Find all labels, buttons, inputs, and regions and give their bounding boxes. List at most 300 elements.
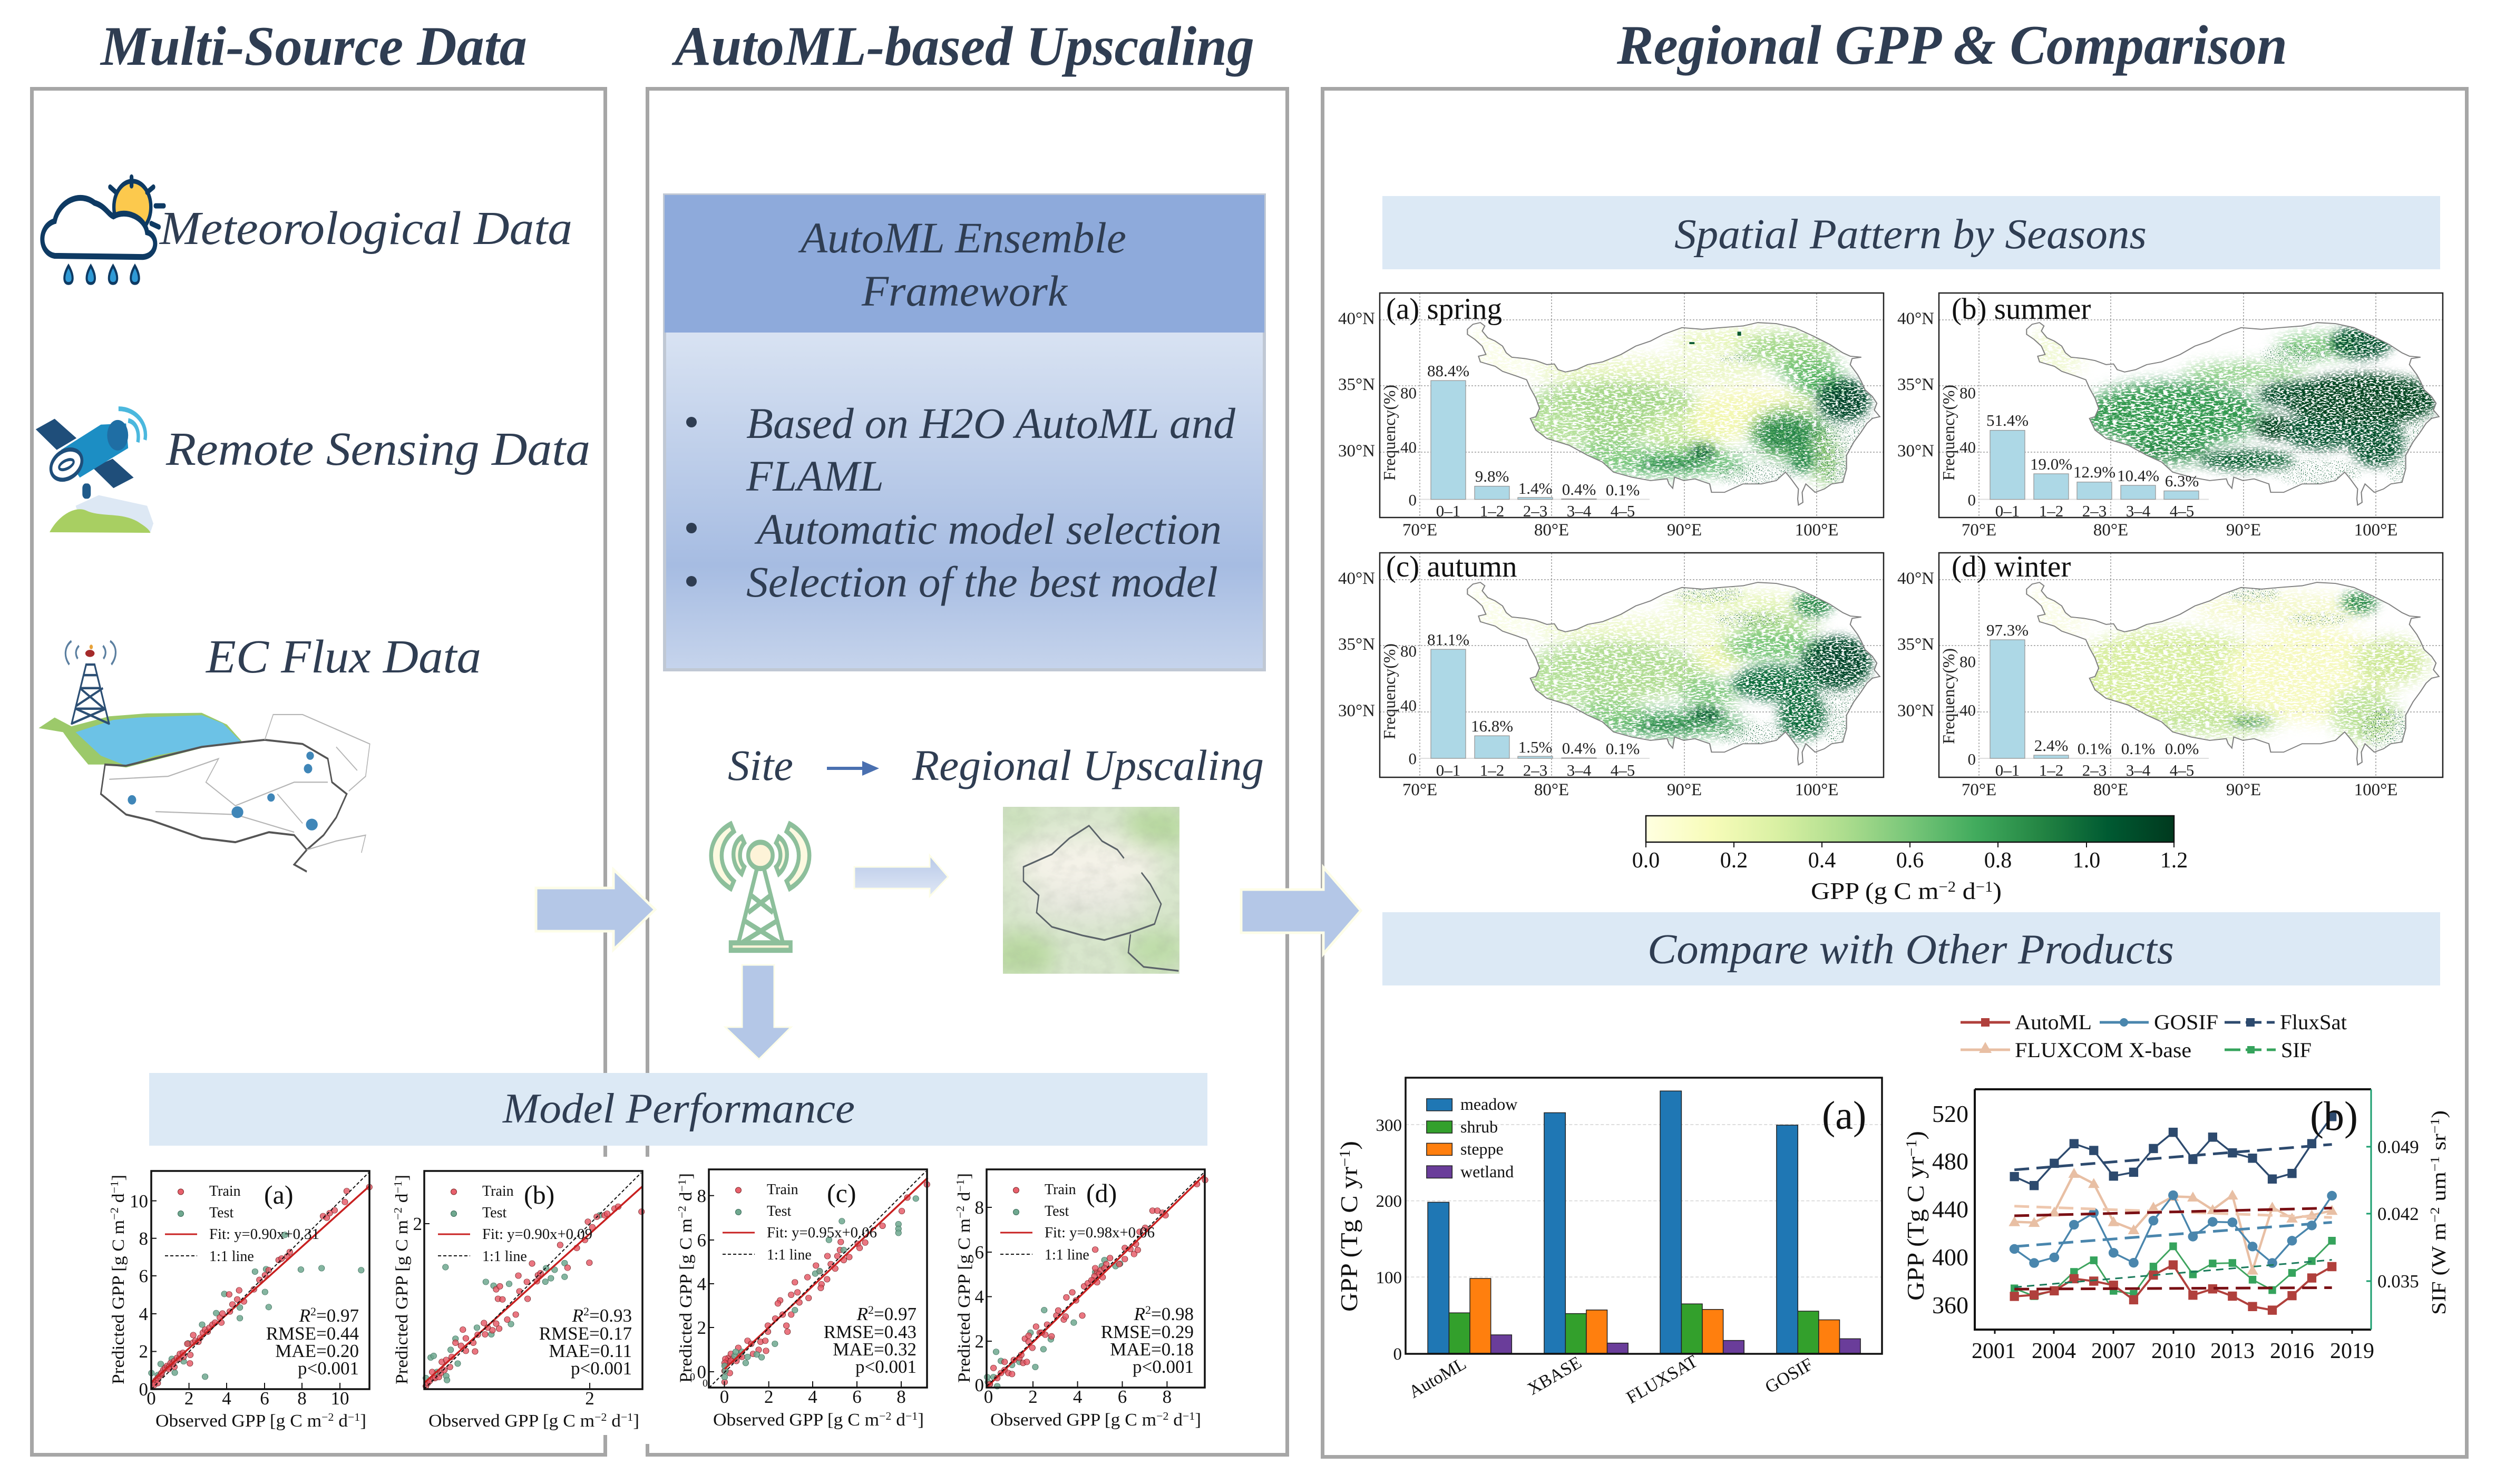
panel: multi-source data frame [30,87,607,1457]
inset bar chart: winter: 2.4% [2034,736,2068,755]
chart: scatter d: Test [1045,1203,1069,1219]
inset bar chart: winter [1939,621,2209,779]
chart: scatter c: Predicted GPP [g C m [677,1229,696,1383]
inset bar chart: autumn: Frequency(%) [1380,643,1399,739]
chart: scatter b: d [607,1411,621,1431]
colorbar legend: 0.2 [1720,848,1748,873]
chart: scatter d: −1 [1183,1410,1195,1422]
chart: scatter c: Train [767,1182,798,1198]
inset bar chart: summer [1939,384,2209,520]
chart: scatter c: ] [677,1173,696,1179]
icon: flux tower and site map [38,641,370,872]
chart: scatter a: 8 [297,1388,307,1409]
inset bar chart: winter: 80 [1959,652,1976,671]
text: Remote Sensing Data: Remote Sensing Data [165,423,590,475]
chart: GPP time series (b): ) [2428,1110,2450,1118]
chart: scatter d: 0 [984,1387,993,1407]
chart: scatter d: (d) [1086,1178,1117,1208]
chart: scatter a: 8 [139,1228,148,1249]
inset bar chart: autumn: 3–4 [1567,761,1592,779]
icon: satellite over ground [36,409,153,533]
chart: scatter b: ] [393,1175,412,1181]
chart: bar comparison (a): 300 [1376,1116,1402,1135]
inset bar chart: winter: 0–1 [1995,761,2020,779]
inset bar chart: autumn: 81.1% [1427,630,1469,649]
inset bar chart: spring: 0.4% [1562,480,1596,499]
chart: scatter c: ] [918,1410,924,1430]
chart: scatter a: 10 [331,1388,349,1409]
panel: AutoML upscaling frame [646,87,1289,1457]
chart: scatter c: 1:1 line [767,1247,812,1263]
chart: scatter b: p<0.001 [571,1358,632,1379]
title: Multi-Source Data: Multi-Source Data [100,15,527,77]
chart: scatter d: 2 [1028,1387,1038,1407]
inset bar chart: winter: 0.0% [2165,739,2199,758]
inset bar chart: summer: 0–1 [1995,502,2020,520]
map panel: (b) summer: 40°N [1897,309,1934,328]
text: framework heading [798,213,1126,315]
heading bar: Spatial Pattern by Seasons [1382,196,2440,269]
chart: scatter a: 6 [260,1388,269,1409]
chart: scatter d: 0 [975,1375,984,1395]
inset bar chart: winter: 3–4 [2126,761,2151,779]
chart: scatter a: Fit: y=0.90x+0.31 [209,1226,319,1243]
inset bar chart: autumn [1380,630,1650,779]
inset bar chart: autumn: 0–1 [1436,761,1460,779]
chart: scatter a: MAE=0.20 [275,1341,359,1361]
chart: scatter b: ] [633,1411,639,1431]
chart: scatter b: R [572,1305,583,1326]
map panel: (d) winter: 70°E [1962,780,1996,799]
map panel: (c) autumn: 80°E [1534,780,1569,799]
inset bar chart: spring: 9.8% [1475,467,1509,485]
inset bar chart: autumn: 2–3 [1523,761,1547,779]
map panel: (d) winter: 35°N [1897,635,1934,654]
map panel: (c) autumn: (c) autumn [1386,550,1517,583]
chart: scatter a: ] [360,1411,366,1431]
heading bar: Spatial Pattern by Seasons: Spatial Pattern by Seasons [1674,211,2147,258]
chart: scatter d: −2 [1156,1410,1168,1422]
chart: GPP time series (b): (b) [2310,1093,2358,1139]
chart: scatter c: −1 [676,1179,688,1192]
inset bar chart: summer: 6.3% [2165,472,2199,490]
chart: scatter a: p<0.001 [298,1358,359,1379]
map panel: (a) spring [1338,292,1884,540]
chart: scatter c: 8 [896,1387,906,1407]
chart: scatter b: Train [482,1183,514,1199]
map panel: (d) winter [1897,550,2443,799]
chart: scatter c: d [677,1192,696,1206]
map panel: (a) spring: 35°N [1338,375,1375,394]
text: framework bullets: FLAML [746,452,884,500]
arrow: site to regional [827,761,879,776]
inset bar chart: spring: 3–4 [1567,502,1592,520]
chart: bar comparison (a): XBASE [1524,1353,1585,1399]
map panel: (c) autumn: 35°N [1338,635,1375,654]
map panel: (a) spring: 100°E [1795,521,1838,540]
chart: scatter a: −2 [108,1207,121,1220]
inset bar chart: summer: 1–2 [2039,502,2063,520]
inset bar chart: summer: 0 [1968,491,1976,509]
inset bar chart: spring: Frequency(%) [1380,385,1399,481]
chart: scatter b [392,1171,642,1431]
inset bar chart: autumn: 0.4% [1562,739,1596,757]
chart: scatter a: −1 [348,1411,360,1423]
chart: scatter c: 0 [697,1362,706,1382]
map panel: (a) spring: 30°N [1338,442,1375,461]
chart: bar comparison (a): GOSIF [1762,1354,1817,1397]
chart: scatter c: 2 [697,1317,706,1338]
map panel: (d) winter: 40°N [1897,569,1934,588]
inset bar chart: winter: 97.3% [1986,621,2029,639]
chart: GPP time series (b): 2007 [2091,1339,2136,1363]
inset bar chart: winter: Frequency(%) [1939,648,1958,744]
colorbar legend: 0.0 [1632,848,1660,873]
chart: scatter a: =0.97 [316,1305,359,1326]
map panel: (c) autumn [1338,550,1884,799]
chart: scatter a: 6 [139,1266,148,1286]
chart: GPP time series (b): 520 [1932,1100,1968,1127]
chart: scatter c: 4 [808,1387,817,1407]
inset bar chart: spring: 40 [1400,438,1417,456]
chart: scatter c: 4 [697,1274,706,1294]
chart: scatter a: 2 [310,1305,316,1318]
inset bar chart: winter: 0 [1968,750,1976,768]
chart: scatter a: −2 [321,1411,334,1423]
chart: scatter d: 4 [1073,1387,1082,1407]
chart: scatter b: 2 [583,1305,589,1318]
chart: scatter a: R [299,1305,310,1326]
heading bar: Compare with Other Products [1382,912,2440,985]
chart: bar comparison (a): GPP (Tg C yr [1335,1178,1362,1312]
inset bar chart: winter: 0.1% [2078,739,2111,758]
colorbar legend: GPP (g C m [1811,877,1928,904]
chart: scatter d: 6 [975,1242,984,1263]
map panel: (a) spring: 80°E [1534,521,1569,540]
inset bar chart: spring: 0 [1408,491,1417,509]
chart: scatter c: −2 [676,1206,688,1218]
inset bar chart: autumn: 80 [1400,642,1417,660]
inset bar chart: autumn: 40 [1400,696,1417,715]
chart: scatter b: −1 [621,1411,633,1423]
chart: scatter d: R [1134,1304,1145,1324]
chart: GPP time series (b): 2004 [2032,1339,2076,1363]
inset bar chart: summer: 80 [1959,384,1976,402]
map panel: (d) winter: 30°N [1897,701,1934,720]
chart: scatter c: 0 [690,1371,695,1383]
map panel: (d) winter: 100°E [2354,780,2397,799]
colorbar legend: 1.0 [2073,848,2100,873]
colorbar legend: 0.8 [1984,848,2012,873]
map panel: (d) winter: (d) winter [1952,550,2071,583]
map panel: (b) summer: 35°N [1897,375,1934,394]
chart: scatter a: 4 [222,1388,231,1409]
chart: scatter c: 0 [703,1378,708,1389]
chart: scatter a: 1:1 line [209,1248,254,1265]
map panel: (c) autumn: 100°E [1795,780,1838,799]
legend: line chart: GOSIF [2154,1010,2218,1034]
chart: GPP time series (b): sr [2428,1134,2450,1156]
text: framework bullets: Selection of the best model [746,558,1218,606]
chart: bar comparison (a): AutoML [1406,1354,1470,1402]
inset bar chart: summer: 19.0% [2030,455,2072,473]
inset bar chart: summer: 2–3 [2082,502,2107,520]
icon: cloud with sun and rain [42,177,164,284]
chart: bar comparison (a): ) [1335,1141,1362,1150]
chart: GPP time series (b): 0.049 [2377,1137,2419,1157]
map panel: (b) summer: 30°N [1897,442,1934,461]
chart: bar comparison (a) [1335,1078,1882,1408]
heading bar: Compare with Other Products: Compare with Other Products [1647,926,2174,973]
chart: scatter d: p<0.001 [1133,1356,1194,1377]
arrow: tower to regional map [854,855,948,896]
chart: scatter a [108,1171,369,1431]
chart: bar comparison (a): steppe [1460,1139,1504,1158]
chart: scatter d: 8 [1163,1387,1172,1407]
text: Regional Upscaling: Regional Upscaling [912,741,1264,789]
chart: GPP time series (b): 2013 [2210,1339,2255,1363]
chart: scatter c: 6 [697,1230,706,1251]
chart: scatter b: −1 [392,1181,404,1194]
map panel: (c) autumn: 70°E [1402,780,1437,799]
colorbar legend: d [1956,877,1976,904]
map panel: (b) summer: 100°E [2354,521,2397,540]
chart: bar comparison (a): (a) [1822,1094,1866,1138]
chart: GPP time series (b): −1 [2429,1118,2442,1134]
map panel: (d) winter: 80°E [2093,780,2128,799]
colorbar legend: 1.2 [2160,848,2188,873]
chart: scatter a: d [334,1411,348,1431]
icon: site tower [711,824,810,950]
inset bar chart: winter: 1–2 [2039,761,2063,779]
chart: GPP time series (b): −1 [2429,1156,2442,1171]
chart: bar comparison (a): wetland [1460,1162,1514,1181]
chart: scatter a: Train [209,1183,241,1199]
inset bar chart: spring: 0–1 [1436,502,1460,520]
inset bar chart: summer: 51.4% [1986,411,2029,429]
inset bar chart: autumn: 0.1% [1606,739,1640,758]
legend: line chart: AutoML [2015,1010,2092,1034]
chart: scatter a: Observed GPP [g C m [155,1411,315,1431]
chart: scatter d: 2 [975,1331,984,1352]
chart: scatter d: =0.98 [1151,1304,1194,1324]
chart: scatter c: −2 [879,1410,891,1422]
chart: bar comparison (a): 0 [1393,1345,1402,1364]
colorbar legend: ) [1993,877,2002,904]
map panel: (a) spring: (a) spring [1386,292,1502,326]
text: framework bullets: Based on H2O AutoML and [746,399,1236,447]
colorbar legend [1632,816,2188,904]
legend: line chart: FluxSat [2280,1010,2347,1034]
inset bar chart: winter: 2–3 [2082,761,2107,779]
text: framework bullets: Automatic model selection [754,505,1222,553]
title: AutoML-based Upscaling: AutoML-based Upscaling [671,15,1254,77]
text: framework bullets [686,399,1236,606]
chart: GPP time series (b): 360 [1932,1292,1968,1319]
inset bar chart: autumn: 0 [1408,749,1417,768]
chart: scatter b: 2 [585,1388,594,1409]
colorbar legend: −1 [1976,879,1993,895]
chart: scatter b: MAE=0.11 [549,1341,632,1361]
chart: scatter c: Fit: y=0.95x+0.06 [767,1225,877,1241]
chart: GPP time series (b) [1902,1089,2450,1363]
chart: scatter d: RMSE=0.29 [1101,1322,1194,1342]
inset bar chart: winter: 40 [1959,701,1976,719]
inset bar chart: spring: 0.1% [1606,481,1640,499]
inset bar chart: summer: 3–4 [2126,502,2151,520]
chart: scatter a: Test [209,1205,233,1221]
inset bar chart: summer: 40 [1959,438,1976,456]
chart: scatter a: 0 [139,1379,148,1400]
map panel: (c) autumn: 90°E [1667,780,1702,799]
chart: scatter b: RMSE=0.17 [539,1323,632,1344]
icon: regional terrain map [1003,807,1179,974]
chart: scatter c: p<0.001 [855,1356,916,1377]
chart: scatter a: −1 [108,1181,121,1194]
chart: scatter c: −1 [905,1410,918,1422]
inset bar chart: autumn: 4–5 [1611,761,1635,779]
chart: scatter d: 2 [1145,1303,1151,1316]
chart: bar comparison (a): 100 [1376,1268,1402,1287]
inset bar chart: spring: 1–2 [1480,502,1504,520]
arrow: tower down to model performance [725,965,791,1059]
chart: scatter b: (b) [524,1180,554,1209]
chart: bar comparison (a): shrub [1460,1117,1498,1136]
arrow: upscaling to regional [1241,867,1361,954]
inset bar chart: autumn: 1.5% [1518,738,1552,756]
legend: line chart: SIF [2281,1038,2312,1062]
chart: GPP time series (b): 0.042 [2377,1204,2419,1224]
map panel: (b) summer [1897,292,2443,540]
panel: regional GPP frame [1321,87,2469,1459]
chart: scatter d: Predicted GPP [g C m [955,1229,974,1383]
inset bar chart: spring: 2–3 [1523,502,1547,520]
chart: scatter d: Observed GPP [g C m [990,1410,1150,1430]
chart: scatter b: −2 [594,1411,607,1423]
map panel: (c) autumn: 40°N [1338,569,1375,588]
chart: bar comparison (a): meadow [1460,1095,1517,1114]
chart: scatter c: 8 [697,1186,706,1206]
colorbar legend: 0.6 [1896,848,1924,873]
chart: scatter b: Fit: y=0.90x+0.09 [482,1226,592,1243]
chart: scatter b: d [393,1193,412,1207]
chart: scatter c: MAE=0.32 [833,1339,916,1360]
chart: GPP time series (b): ) [1902,1131,1929,1140]
heading bar: Model Performance: Model Performance [502,1086,855,1132]
map panel: (a) spring: 90°E [1667,521,1702,540]
chart: GPP time series (b): um [2428,1171,2450,1207]
chart: scatter d: −2 [954,1206,967,1218]
legend: line chart [1961,1010,2347,1062]
inset bar chart: autumn: 16.8% [1471,717,1513,735]
chart: scatter d: 4 [975,1286,984,1307]
chart: scatter a: ] [109,1175,128,1181]
chart: scatter d: ] [955,1173,974,1179]
panel: AutoML Ensemble Framework [665,195,1264,670]
inset bar chart: autumn: 1–2 [1480,761,1504,779]
chart: GPP time series (b): 0.035 [2377,1271,2419,1292]
chart: GPP time series (b): SIF (W m [2428,1235,2450,1315]
inset bar chart: summer: 4–5 [2170,502,2194,520]
chart: GPP time series (b): −1 [1904,1140,1920,1157]
chart: scatter b: Observed GPP [g C m [428,1411,588,1431]
inset bar chart: winter: 0.1% [2121,739,2155,758]
title: Regional GPP & Comparison: Regional GPP & Comparison [1616,14,2287,76]
text: EC Flux Data: EC Flux Data [205,631,481,683]
chart: scatter b: 2 [413,1214,422,1234]
chart: bar comparison (a): FLUXSAT [1623,1351,1701,1408]
inset bar chart: summer: 10.4% [2117,466,2159,485]
chart: scatter d [954,1169,1205,1430]
colorbar legend: 0.4 [1808,848,1836,873]
chart: scatter b: 1:1 line [482,1248,527,1265]
inset bar chart: spring: 80 [1400,384,1417,402]
inset bar chart: winter: 4–5 [2170,761,2194,779]
inset bar chart: summer: 12.9% [2073,463,2115,481]
chart: GPP time series (b): −2 [2429,1207,2442,1223]
chart: scatter c: =0.97 [874,1304,916,1324]
chart: scatter b: =0.93 [589,1305,632,1326]
map panel: (b) summer: (b) summer [1952,292,2091,326]
chart: GPP time series (b): 2016 [2270,1339,2314,1363]
chart: scatter d: 8 [975,1197,984,1218]
chart: scatter c: 2 [764,1387,773,1407]
chart: GPP time series (b): 2019 [2330,1339,2374,1363]
map panel: (b) summer: 70°E [1962,521,1996,540]
chart: GPP time series (b): 2010 [2151,1339,2196,1363]
legend: line chart: FLUXCOM X-base [2015,1038,2191,1062]
map panel: (b) summer: 80°E [2093,521,2128,540]
chart: scatter a: 10 [130,1191,148,1212]
chart: scatter c: (c) [827,1178,856,1208]
chart: scatter b: −2 [392,1207,404,1220]
chart: scatter c: Test [767,1203,791,1219]
chart: scatter d: MAE=0.18 [1110,1339,1194,1360]
chart: scatter d: −1 [954,1179,967,1192]
inset bar chart: spring: 88.4% [1427,362,1469,380]
chart: scatter b: Test [482,1205,506,1221]
chart: scatter a: (a) [264,1180,293,1209]
text: Site: Site [728,741,793,789]
chart: bar comparison (a): 200 [1376,1192,1402,1211]
chart: bar comparison (a): −1 [1337,1150,1353,1167]
map panel: (d) winter: 90°E [2226,780,2261,799]
chart: scatter c [676,1169,928,1430]
colorbar legend: −2 [1938,879,1956,895]
arrow: data to upscaling [536,870,655,950]
map panel: (b) summer: 90°E [2226,521,2261,540]
chart: GPP time series (b): 2001 [1972,1339,2016,1363]
chart: scatter c: 2 [868,1303,874,1316]
chart: GPP time series (b): GPP (Tg C yr [1902,1167,1929,1301]
chart: scatter a: d [109,1193,128,1207]
inset bar chart: spring: 1.4% [1518,479,1552,497]
map panel: (a) spring: 70°E [1402,521,1437,540]
text: framework heading: Framework [861,267,1068,315]
chart: scatter c: d [891,1410,905,1430]
chart: scatter b: Predicted GPP [g C m [393,1231,412,1384]
chart: scatter d: Fit: y=0.98x+0.06 [1045,1225,1155,1241]
text: Meteorological Data: Meteorological Data [159,202,572,255]
map panel: (c) autumn: 30°N [1338,701,1375,720]
chart: scatter a: 0 [147,1388,156,1409]
chart: scatter a: Predicted GPP [g C m [109,1231,128,1384]
chart: scatter d: 6 [1118,1387,1127,1407]
chart: scatter c: RMSE=0.43 [824,1322,916,1342]
inset bar chart: spring: 4–5 [1611,502,1635,520]
text: framework heading: AutoML Ensemble [798,213,1126,262]
chart: GPP time series (b): 440 [1932,1196,1968,1223]
